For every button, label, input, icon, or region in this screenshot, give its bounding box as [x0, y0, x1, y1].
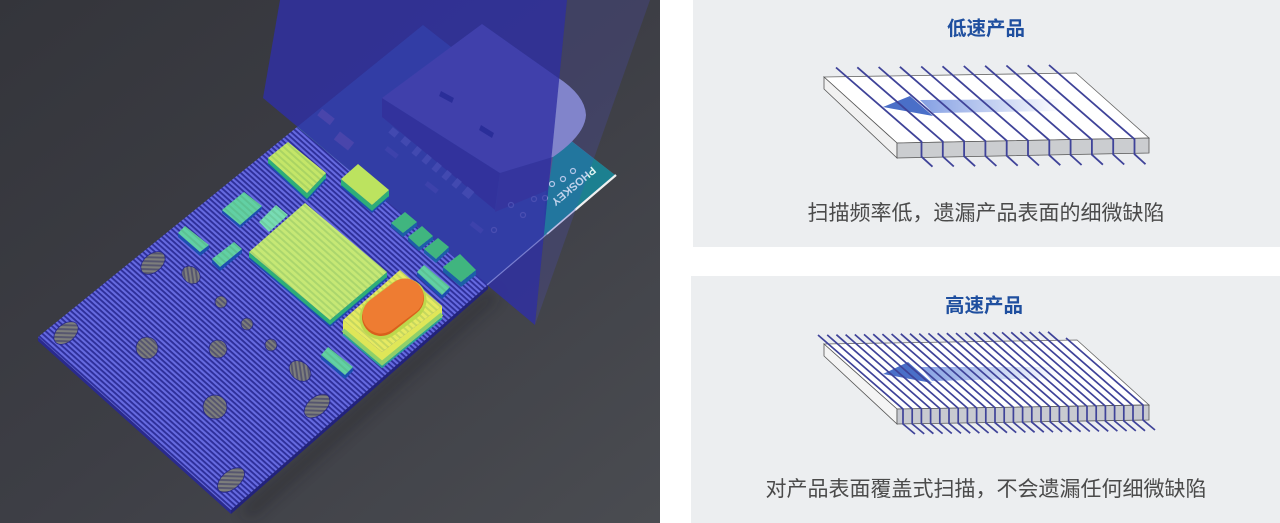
heading: low speed: 低速产品	[947, 18, 1025, 40]
PCB board with scan stripes	[38, 25, 615, 514]
heading: high speed: 高速产品	[945, 294, 1023, 317]
board edge seen through plane	[487, 234, 547, 285]
caption: high speed: 对产品表面覆盖式扫描，不会遗漏任何细微缺陷	[766, 478, 1206, 501]
small green pads	[391, 212, 476, 287]
panel: PCB laser scan scene	[0, 0, 660, 523]
chip: upper middle	[341, 164, 389, 212]
panel: low speed product	[693, 0, 1280, 247]
connector pins and PCB parts	[317, 109, 484, 234]
arrow: scan direction	[883, 362, 1060, 383]
mounting holes	[49, 247, 334, 497]
arrow: scan direction	[883, 96, 1062, 116]
component: orange switch button	[381, 297, 405, 318]
diagram: sparse scan on plate	[824, 65, 1149, 167]
PCB vias	[492, 168, 576, 232]
USB connector	[382, 24, 586, 212]
brand text on PCB: PHOSKEY	[548, 164, 598, 208]
scan lines	[836, 65, 1146, 167]
component: tall yellow switch body	[343, 270, 442, 368]
small teal components	[178, 192, 450, 379]
caption: low speed: 扫描频率低，遗漏产品表面的细微缺陷	[808, 202, 1164, 225]
panel: high speed product	[691, 276, 1280, 523]
chip: large central	[249, 203, 387, 326]
PCB white edge	[547, 175, 616, 234]
laser plane: reflected	[535, 0, 650, 325]
diagram: dense scan on plate	[818, 332, 1155, 434]
chip: upper left	[268, 142, 326, 200]
laser plane: main	[263, 0, 567, 325]
scan lines	[818, 332, 1155, 434]
